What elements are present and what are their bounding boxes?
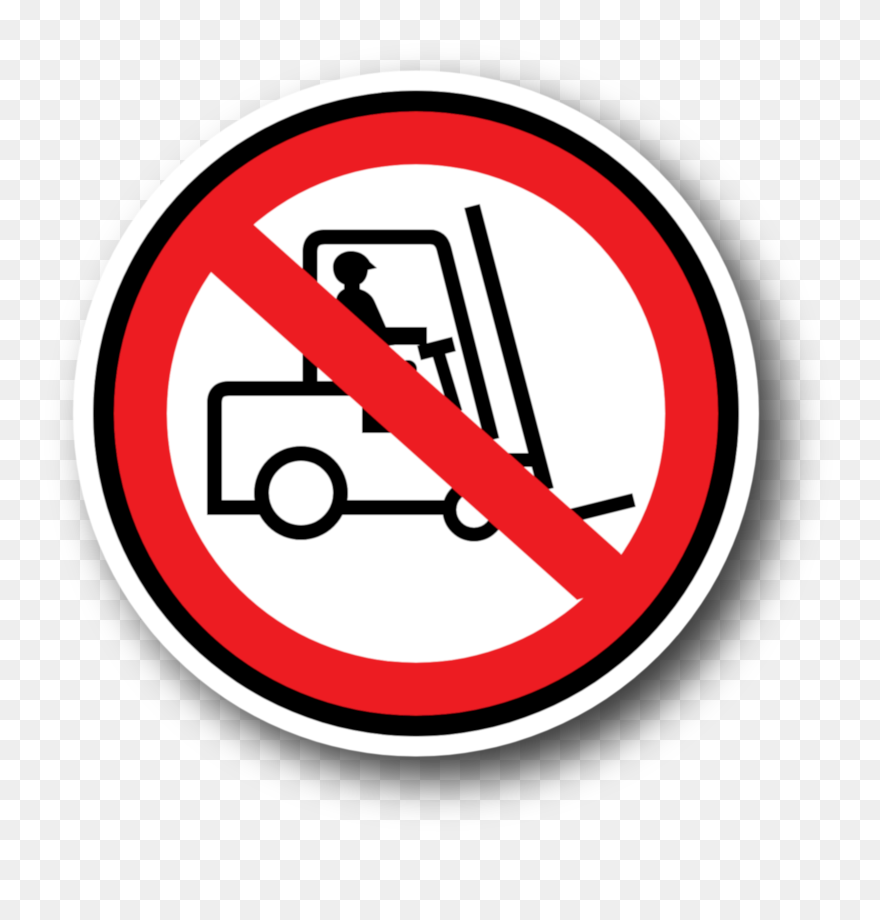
driver head and cap	[333, 251, 377, 286]
forklift cab	[310, 237, 492, 440]
driver	[333, 251, 427, 347]
drop shadow	[96, 94, 782, 780]
forklift fork	[530, 500, 634, 526]
driver torso and arm	[333, 282, 427, 347]
steering wheel	[419, 344, 454, 353]
sign white centre	[167, 164, 665, 662]
steering column	[438, 352, 456, 412]
front wheel	[450, 486, 498, 534]
prohibition sign	[73, 70, 759, 756]
engine block	[362, 396, 440, 433]
forklift carriage	[490, 453, 535, 467]
forklift mast	[472, 206, 546, 490]
rear wheel	[262, 454, 340, 532]
sign outer white border	[73, 70, 759, 756]
prohibition diagonal bar	[190, 203, 640, 600]
sign black ring	[93, 90, 739, 736]
forklift body	[214, 388, 445, 508]
dashboard	[399, 360, 417, 378]
icon: forklift	[214, 206, 634, 534]
sign red ring	[114, 112, 718, 716]
